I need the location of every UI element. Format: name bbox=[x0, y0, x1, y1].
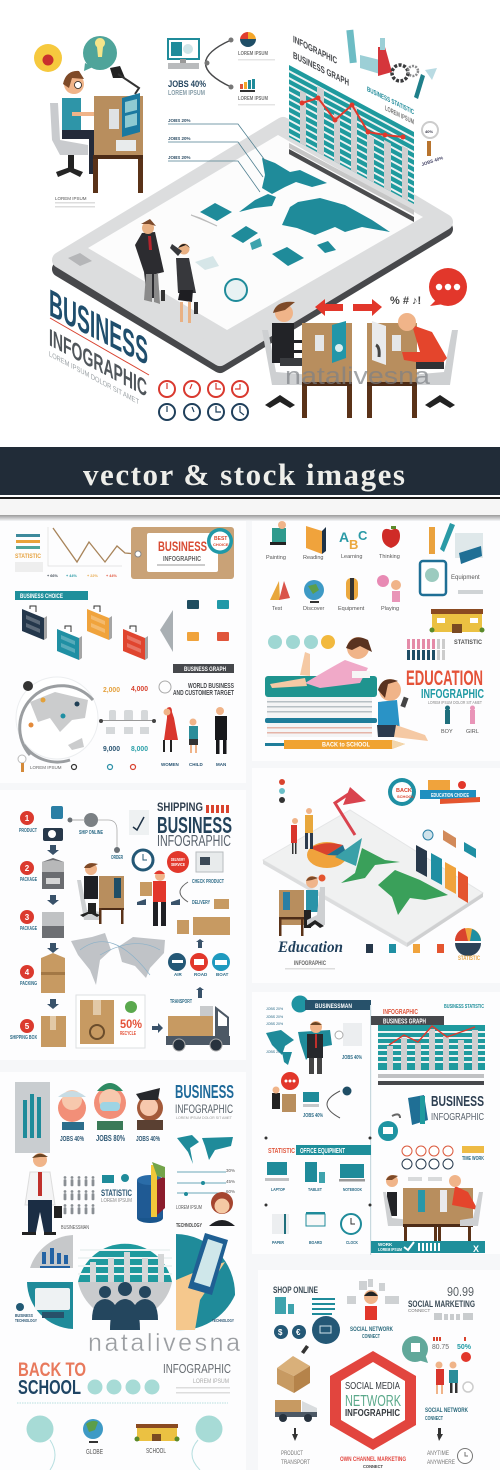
work status bar: LOREM IPSUM bbox=[378, 1247, 402, 1252]
owned channel marketing caption: CONNECT bbox=[363, 1464, 383, 1469]
lab flasks and gears bbox=[346, 30, 437, 99]
globe school labels bbox=[86, 1448, 166, 1456]
panel: businessman and office equipment infographic bbox=[252, 992, 500, 1255]
best choice price tag: BUSINESS bbox=[158, 538, 207, 554]
girl lying on books bbox=[270, 637, 372, 688]
character job labels: JOBS 40% bbox=[136, 1136, 161, 1143]
globe map bbox=[16, 677, 98, 762]
best choice price tag: INFOGRAPHIC bbox=[163, 556, 201, 563]
business circle cards: TECHNOLOGY bbox=[15, 1318, 37, 1323]
world map and stats: TECHNOLOGY bbox=[176, 1223, 202, 1229]
delivery truck small bbox=[275, 1400, 317, 1422]
activity labels row two: Discover bbox=[303, 606, 325, 612]
best choice price tag bbox=[131, 527, 234, 579]
activity labels row two: Equipment bbox=[338, 606, 365, 612]
network percent bubble: 80.75 bbox=[432, 1344, 449, 1351]
best choice price tag: CHOICE bbox=[213, 542, 229, 547]
gray people icons and connecting line bbox=[99, 710, 156, 734]
globe school labels: SCHOOL bbox=[146, 1448, 166, 1455]
statistic office equipment heading: STATISTIC bbox=[268, 1148, 295, 1155]
character job labels: JOBS 40% bbox=[60, 1136, 85, 1143]
infographic caption bbox=[163, 1362, 231, 1394]
social network person: SOCIAL NETWORK bbox=[350, 1327, 394, 1333]
back to school badge: BACK bbox=[396, 788, 412, 794]
business title: LOREM IPSUM DOLOR SIT AMET bbox=[176, 1115, 232, 1120]
red desk lamp bbox=[335, 787, 366, 835]
step labels: PACKAGE bbox=[20, 877, 37, 883]
step numbers: 2 bbox=[25, 864, 30, 873]
business circle cards: BUSINESS bbox=[15, 1313, 33, 1318]
tablet body bbox=[60, 125, 445, 365]
business graph heading: BUSINESS GRAPH bbox=[184, 666, 226, 673]
green world map bbox=[341, 848, 448, 915]
network percent bubble bbox=[402, 1336, 472, 1363]
small case icons bbox=[187, 600, 229, 641]
equipment labels: TABLET bbox=[308, 1187, 322, 1192]
character job labels bbox=[60, 1134, 161, 1143]
equipment labels bbox=[271, 1187, 363, 1245]
pencils tablet and card: Equipment bbox=[451, 575, 480, 581]
chart legend: + 44% bbox=[106, 574, 117, 578]
back to school title: SCHOOL bbox=[18, 1377, 81, 1399]
equipment labels: BOARD bbox=[309, 1240, 323, 1245]
shop online heading and devices: SHOP ONLINE bbox=[273, 1285, 318, 1296]
education title bbox=[406, 667, 484, 705]
product transport labels bbox=[281, 1428, 310, 1466]
magnifier and bottom labels: LOREM IPSUM bbox=[30, 765, 62, 770]
isometric bar and line chart panel bbox=[289, 65, 414, 222]
shop online heading and devices bbox=[273, 1285, 335, 1315]
activity labels row two: Test bbox=[272, 606, 283, 612]
education choice ribbon bbox=[420, 780, 480, 804]
infographic caption: LOREM IPSUM bbox=[193, 1379, 229, 1385]
statistic dot grid bbox=[15, 534, 43, 572]
small desk man and bubble bbox=[272, 1072, 352, 1119]
bar chart card bbox=[15, 1082, 50, 1153]
stat numbers 9000 and 8000: 8,000 bbox=[131, 746, 148, 753]
shipping route world map bbox=[71, 933, 165, 985]
phone and business title bbox=[392, 1093, 484, 1125]
education script title bbox=[277, 939, 343, 970]
business infographic isometric title: INFOGRAPHIC bbox=[49, 324, 147, 403]
recycle box card bbox=[76, 995, 145, 1048]
magnifier and bottom labels bbox=[18, 755, 226, 772]
owned channel marketing caption: OWN CHANNEL MARKETING bbox=[340, 1456, 406, 1463]
social marketing heading: 90.99 bbox=[447, 1284, 474, 1299]
business statistic label: LOREM IPSUM bbox=[385, 103, 414, 126]
step numbers: 3 bbox=[25, 913, 30, 922]
equipment labels: LAPTOP bbox=[271, 1187, 285, 1192]
panel: vector and stock images banner bbox=[0, 447, 500, 521]
statistic pie: STATISTIC bbox=[458, 956, 480, 962]
pencils tablet and card bbox=[420, 523, 483, 595]
pie and bar chart mini icons: LOREM IPSUM bbox=[238, 96, 268, 102]
shipping title: INFOGRAPHIC bbox=[157, 833, 231, 850]
pie chart on platform bbox=[307, 838, 362, 868]
activity labels row one: Thinking bbox=[379, 554, 400, 560]
chart legend: + 66% bbox=[47, 574, 58, 578]
shipping title: SHIPPING bbox=[157, 800, 203, 814]
ship online connector: SHIP ONLINE bbox=[79, 830, 103, 836]
step labels: SHIPPING BOX bbox=[10, 1035, 37, 1041]
delivery service icons: DELIVERY bbox=[192, 900, 210, 906]
stack of books bbox=[265, 676, 377, 746]
business graph chart: INFOGRAPHIC bbox=[383, 1009, 418, 1016]
panel: education infographic bbox=[252, 521, 500, 761]
world map and stats bbox=[176, 1135, 235, 1229]
social network person bbox=[347, 1279, 399, 1340]
business graph chart bbox=[371, 1004, 485, 1085]
monitor icon and jobs statistic: LOREM IPSUM bbox=[168, 88, 205, 97]
red blue side icons bbox=[279, 779, 285, 803]
two people at desks with red arrows: % # ♪! bbox=[390, 295, 421, 307]
infographic caption: INFOGRAPHIC bbox=[163, 1362, 231, 1376]
delivery service icons: SERVICE bbox=[171, 862, 185, 867]
payment circles and cart bbox=[274, 1316, 340, 1354]
panel: back to school infographic bbox=[0, 1329, 246, 1470]
activity icons row one: C bbox=[358, 528, 368, 543]
two people with magnifier: CONNECT bbox=[425, 1416, 443, 1422]
panel: education isometric map infographic bbox=[252, 768, 500, 983]
back to school title bbox=[18, 1360, 86, 1399]
education title: LOREM IPSUM DOLOR SIT AMET bbox=[428, 700, 482, 705]
activity icons row one: A bbox=[339, 529, 349, 545]
world map and stats: 30% bbox=[226, 1168, 235, 1173]
delivery truck: TRANSPORT bbox=[170, 999, 192, 1005]
delivery service icons: DELIVERY bbox=[171, 857, 185, 862]
clipboard icon bbox=[129, 810, 149, 835]
delivery service icons: CHECK PRODUCT bbox=[192, 879, 224, 885]
product transport labels: PRODUCT bbox=[281, 1451, 303, 1457]
delivery man with package bbox=[137, 870, 180, 926]
headset woman bbox=[209, 1192, 235, 1226]
network percent bubble: 50% bbox=[457, 1344, 472, 1351]
small desk man and bubble: JOBS 40% bbox=[303, 1113, 323, 1119]
job percentage leader lines bbox=[168, 124, 267, 192]
step labels: PRODUCT bbox=[19, 828, 37, 834]
connection arcs bbox=[50, 1440, 200, 1470]
phone and business title: INFOGRAPHIC bbox=[431, 1112, 484, 1123]
magnifier 40 percent: 40% bbox=[425, 129, 433, 134]
step labels: PACKAGE bbox=[20, 926, 37, 932]
businessman and businesswoman bbox=[135, 219, 198, 323]
anytime anywhere bbox=[427, 1428, 472, 1466]
device icons on tablet screen bbox=[191, 203, 304, 301]
panel: shipping business infographic bbox=[0, 790, 246, 1060]
page tinted background for lower grid bbox=[0, 521, 500, 1470]
activity labels row one: Learning bbox=[341, 554, 362, 560]
back to school title: BACK TO bbox=[18, 1360, 86, 1381]
desks and workers small bbox=[383, 1175, 483, 1241]
round subject icons bbox=[88, 1380, 160, 1394]
chart title: INFOGRAPHIC bbox=[293, 34, 337, 67]
world business heading: 4,000 bbox=[131, 686, 148, 693]
equipment labels: NOTEBOOK bbox=[343, 1187, 363, 1192]
boy and girl icons bbox=[441, 706, 479, 735]
business statistic label: BUSINESS STATISTIC bbox=[367, 84, 414, 117]
seated man at desk with idea bubbles bbox=[34, 36, 143, 193]
teal computer icon and clock set bbox=[378, 1121, 484, 1169]
map and businessman figure bbox=[266, 1007, 362, 1074]
business title bbox=[175, 1082, 234, 1120]
two people with magnifier bbox=[425, 1362, 473, 1422]
payment circles and cart: € bbox=[296, 1328, 301, 1337]
route arcs bbox=[80, 942, 160, 975]
isometric briefcases bbox=[22, 606, 148, 660]
teal computer icon and clock set: TIME WORK bbox=[462, 1156, 484, 1162]
activity icons row two bbox=[270, 575, 401, 603]
business title: INFOGRAPHIC bbox=[175, 1102, 233, 1116]
transport mode circles: BOAT bbox=[216, 972, 229, 977]
seated person with idea bulb bbox=[279, 874, 326, 936]
back to school badge: SCHOOL bbox=[397, 794, 415, 799]
stat numbers 9000 and 8000: 9,000 bbox=[103, 746, 120, 753]
isometric platform bbox=[263, 810, 483, 947]
lorem ipsum caption left bbox=[55, 196, 95, 208]
world business heading: WORLD BUSINESS bbox=[188, 683, 234, 690]
people target row bbox=[163, 707, 227, 754]
two people at desks with red arrows bbox=[262, 268, 467, 418]
cardboard box stack bbox=[177, 917, 230, 935]
chart legend bbox=[47, 574, 117, 578]
activity icons row one: B bbox=[349, 537, 358, 552]
education script title: Education bbox=[277, 939, 343, 956]
step labels: PACKING bbox=[20, 981, 37, 987]
social network person: CONNECT bbox=[362, 1334, 380, 1340]
social marketing heading: CONNECT bbox=[408, 1308, 431, 1313]
world map on tablet bbox=[239, 158, 390, 253]
book legend bbox=[366, 944, 444, 953]
business graph heading bbox=[173, 664, 234, 673]
statistic pie bbox=[455, 928, 481, 962]
panel: social media network infographic bbox=[258, 1270, 500, 1470]
dotted grid lines bbox=[17, 1402, 228, 1404]
divider rows with end dots bbox=[264, 1136, 372, 1206]
job percentage labels bbox=[168, 118, 191, 160]
activity labels row one: Reading bbox=[303, 555, 324, 561]
map and businessman figure: JOBS 20% bbox=[266, 1015, 283, 1019]
clock icons bbox=[159, 381, 248, 420]
chart title bbox=[293, 34, 349, 89]
recycle box card: 50% bbox=[120, 1017, 142, 1031]
magnifier 40 percent bbox=[421, 122, 444, 167]
school building bbox=[430, 609, 484, 633]
two people with magnifier: SOCIAL NETWORK bbox=[425, 1408, 469, 1414]
two small people on platform bbox=[291, 808, 313, 854]
recycle box card: RECYCLE bbox=[120, 1031, 136, 1037]
boy reading beside books bbox=[377, 679, 428, 741]
ship online connector bbox=[68, 813, 123, 861]
chart title: BUSINESS GRAPH bbox=[293, 50, 349, 89]
office equipment icons bbox=[265, 1162, 365, 1234]
world map and stats: 60% bbox=[226, 1189, 235, 1194]
chart legend: + 44% bbox=[66, 574, 77, 578]
watermark top: natalivesna bbox=[285, 363, 431, 390]
anytime anywhere: ANYWHERE bbox=[427, 1460, 455, 1466]
red hexagon network title: SOCIAL MEDIA bbox=[345, 1381, 400, 1392]
step number circles bbox=[20, 811, 34, 1033]
business infographic isometric title: LOREM IPSUM DOLOR SIT AMET bbox=[49, 349, 139, 407]
step product icons bbox=[41, 806, 66, 1047]
map and businessman figure: JOBS 20% bbox=[266, 1022, 283, 1026]
best choice price tag: BEST bbox=[214, 536, 227, 542]
statistic office equipment heading bbox=[268, 1145, 371, 1155]
school icon bbox=[134, 1424, 180, 1442]
business statistic label bbox=[367, 84, 414, 126]
product transport labels: TRANSPORT bbox=[281, 1460, 310, 1466]
map and businessman figure: JOBS 20% bbox=[266, 1007, 283, 1011]
magnifier 40 percent: JOBS 40% bbox=[421, 155, 444, 167]
payment circles and cart: $ bbox=[278, 1328, 283, 1337]
activity labels row one bbox=[266, 554, 400, 561]
magnifier and bottom labels: MAN bbox=[216, 762, 226, 767]
map and businessman figure: JOBS 40% bbox=[342, 1055, 362, 1061]
red hexagon network title bbox=[330, 1351, 416, 1450]
magnifier and bottom labels: WOMEN bbox=[161, 762, 179, 767]
back to school pencil bbox=[284, 740, 405, 749]
transport mode circles: ROAD bbox=[194, 972, 208, 977]
3d cylinder chart bbox=[137, 1162, 165, 1223]
gray triangle pointer bbox=[160, 610, 173, 652]
light teal icon circles bbox=[26, 1416, 222, 1442]
back to school badge bbox=[388, 778, 416, 806]
business choice heading: BUSINESS CHOICE bbox=[20, 593, 63, 600]
owned channel marketing caption bbox=[340, 1456, 406, 1469]
business graph chart: BUSINESS STATISTIC bbox=[444, 1004, 484, 1010]
activity labels row two bbox=[272, 606, 399, 612]
cardboard box bbox=[277, 1356, 310, 1393]
globe school labels: GLOBE bbox=[86, 1449, 103, 1456]
education choice ribbon: EDUCATION CHOICE bbox=[431, 793, 469, 799]
pie and bar chart mini icons: LOREM IPSUM bbox=[238, 51, 268, 57]
pie and bar chart mini icons bbox=[238, 32, 275, 106]
world map and stats: LOREM IPSUM bbox=[176, 1205, 202, 1211]
red hexagon network title: NETWORK bbox=[345, 1393, 401, 1410]
statistic people rows bbox=[407, 639, 483, 660]
panel: isometric tablet business infographic bbox=[34, 30, 467, 420]
business infographic isometric title bbox=[49, 280, 149, 407]
hand holding phone bbox=[176, 1233, 235, 1330]
world map and stats: 45% bbox=[226, 1179, 235, 1184]
business circle cards bbox=[15, 1235, 73, 1329]
stat numbers 9000 and 8000 bbox=[103, 746, 148, 753]
shipping title bbox=[157, 800, 232, 850]
businessman heading: BUSINESSMAN bbox=[315, 1003, 352, 1010]
hand holding phone: TECHNOLOGY bbox=[212, 1318, 234, 1323]
businessman with red tie bbox=[22, 1153, 89, 1235]
statistic dot grid: STATISTIC bbox=[15, 553, 41, 560]
statistic people rows: STATISTIC bbox=[454, 640, 483, 646]
world business heading: 2,000 bbox=[103, 687, 120, 694]
business title: BUSINESS bbox=[175, 1082, 234, 1102]
banner title: vector & stock images bbox=[83, 457, 405, 492]
center stripe circle with suits bbox=[78, 1244, 172, 1330]
monitor icon and jobs statistic: JOBS 40% bbox=[168, 79, 206, 90]
job percentage labels: JOBS 20% bbox=[168, 155, 191, 160]
boy and girl icons: BOY bbox=[441, 729, 453, 735]
round subject icons bbox=[268, 635, 335, 649]
panel: business choice infographic bbox=[0, 521, 246, 783]
job percentage labels: JOBS 20% bbox=[168, 136, 191, 141]
seated worker at desk bbox=[77, 863, 124, 924]
red hexagon network title: INFOGRAPHIC bbox=[345, 1408, 400, 1419]
social marketing heading: SOCIAL MARKETING bbox=[408, 1299, 475, 1309]
business infographic isometric title: BUSINESS bbox=[49, 280, 148, 374]
social marketing heading bbox=[408, 1284, 475, 1320]
statistic people rows bbox=[64, 1176, 94, 1214]
chart legend: + 22% bbox=[87, 574, 98, 578]
globe icon bbox=[83, 1419, 103, 1443]
delivery service icons bbox=[133, 850, 229, 909]
back to school pencil: BACK to SCHOOL bbox=[322, 742, 370, 748]
map and businessman figure: JOBS 20% bbox=[266, 1050, 283, 1054]
world business heading bbox=[103, 681, 234, 697]
transport mode circles bbox=[168, 939, 230, 998]
watermark lower: natalivesna bbox=[88, 1329, 240, 1357]
activity labels row one: Painting bbox=[266, 555, 286, 561]
line chart bbox=[48, 527, 137, 566]
boy and girl icons: GIRL bbox=[466, 729, 479, 735]
panel: business infographic with characters bbox=[0, 1072, 246, 1340]
world business heading: AND CUSTOMER TARGET bbox=[173, 690, 234, 697]
activity icons row one bbox=[270, 521, 400, 554]
work status bar: X bbox=[473, 1244, 479, 1254]
statistic label bbox=[101, 1174, 132, 1204]
isometric book cards bbox=[416, 830, 476, 903]
statistic office equipment heading: OFFICE EQUIPMENT bbox=[300, 1148, 345, 1155]
delivery truck bbox=[152, 999, 230, 1051]
step labels bbox=[10, 828, 37, 1041]
step numbers: 5 bbox=[25, 1022, 30, 1031]
equipment labels: CLOCK bbox=[346, 1240, 359, 1245]
step numbers bbox=[25, 814, 30, 1031]
business choice heading bbox=[15, 591, 88, 600]
businessman with red tie: BUSINESSMAN bbox=[61, 1225, 89, 1231]
education script title: INFOGRAPHIC bbox=[294, 961, 327, 967]
statistic label: STATISTIC bbox=[101, 1188, 132, 1198]
shipping title: BUSINESS bbox=[157, 812, 232, 838]
transport mode circles: AIR bbox=[174, 972, 182, 977]
ship online connector: ORDER bbox=[111, 855, 123, 861]
magnifier and bottom labels: CHILD bbox=[189, 762, 203, 767]
statistic label: LOREM IPSUM bbox=[101, 1198, 132, 1204]
anytime anywhere: ANYTIME bbox=[427, 1451, 449, 1457]
monitor icon and jobs statistic bbox=[168, 38, 234, 97]
step numbers: 1 bbox=[25, 814, 30, 823]
equipment labels: PAPER bbox=[272, 1240, 285, 1245]
step numbers: 4 bbox=[25, 968, 30, 977]
lorem ipsum caption left: LOREM IPSUM bbox=[55, 196, 87, 201]
character job labels: JOBS 80% bbox=[96, 1134, 125, 1143]
work status bar bbox=[371, 1241, 485, 1254]
activity labels row two: Playing bbox=[381, 606, 399, 612]
vertical divider bbox=[370, 1005, 371, 1255]
business graph chart: BUSINESS GRAPH bbox=[383, 1018, 426, 1026]
businessman heading bbox=[292, 996, 371, 1012]
three character portraits bbox=[58, 1083, 163, 1130]
job percentage labels: JOBS 20% bbox=[168, 118, 191, 123]
work status bar: WORK bbox=[378, 1242, 393, 1247]
